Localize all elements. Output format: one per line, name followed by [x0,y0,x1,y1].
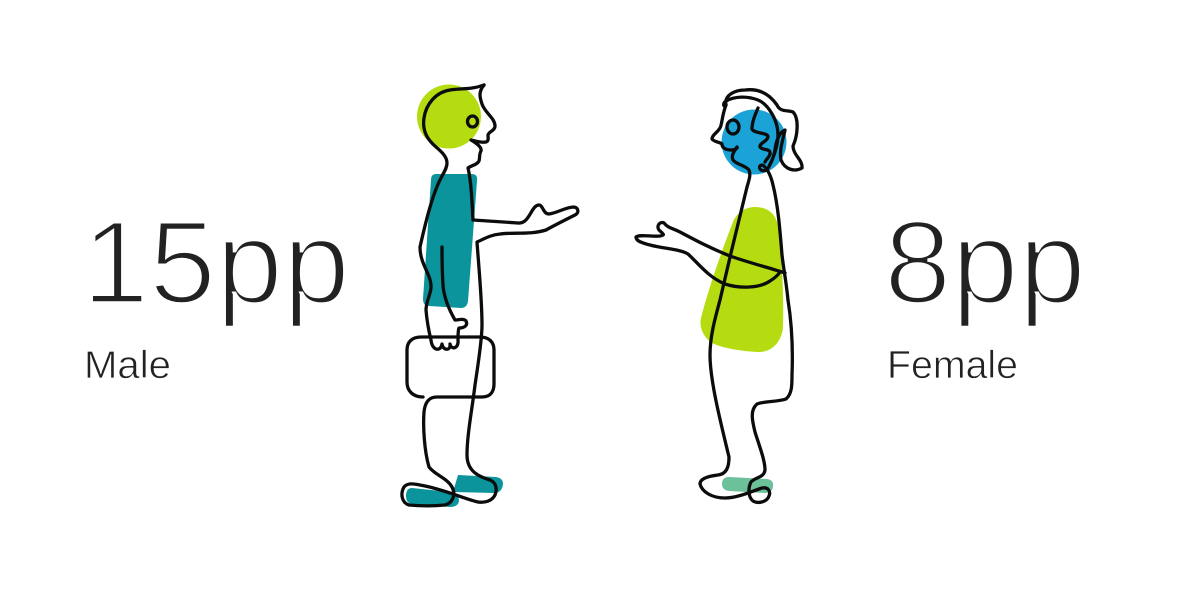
female head colour [722,110,786,174]
illustration: male figure [402,84,578,507]
label: Female: Female [887,344,1018,387]
male head colour [417,84,481,148]
female back and hair line [724,90,802,300]
female shoe colour [722,477,773,493]
female dress colour [700,207,783,352]
male shoes colour [406,475,503,507]
male eye [468,116,478,127]
female eye [727,120,739,134]
female ear squiggle [752,108,770,162]
male statistic [82,197,350,387]
value: 15pp: 15pp [82,197,350,329]
male torso colour [423,174,477,308]
label: Male: Male [84,344,171,387]
value: 8pp: 8pp [884,197,1086,329]
female face and body line [700,105,792,502]
illustration: female figure [636,90,802,502]
female arm [636,223,785,287]
male line drawing [420,85,484,349]
female statistic [884,197,1086,387]
